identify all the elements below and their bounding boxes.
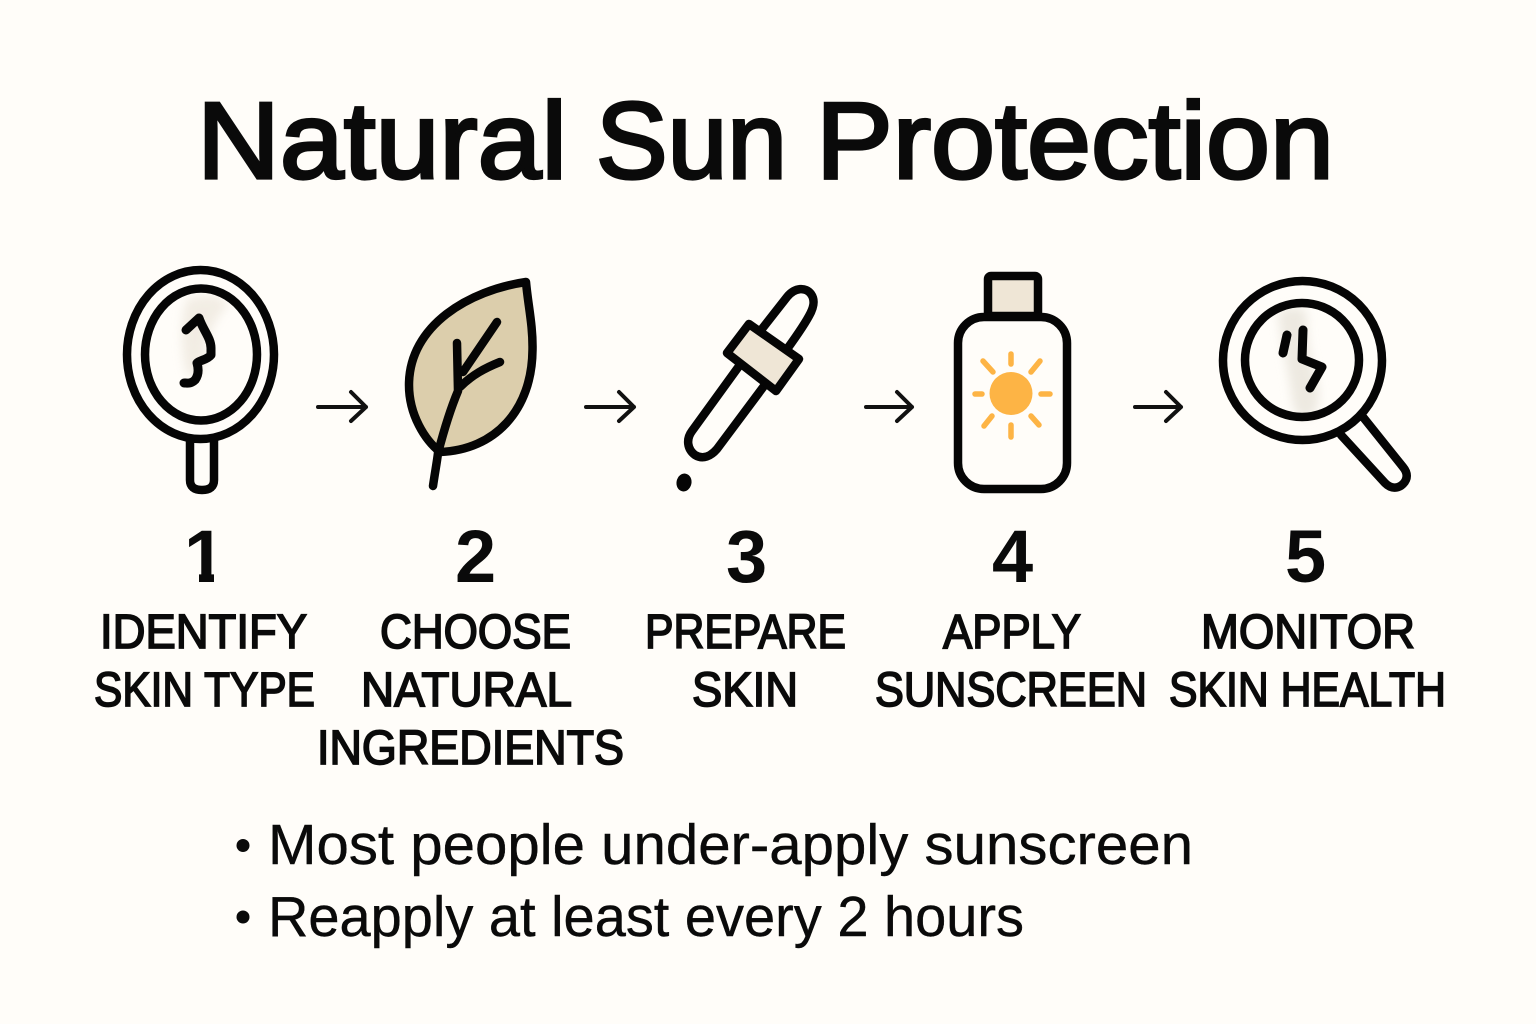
step 3 label: SKIN (692, 664, 798, 717)
arrow 2 (586, 392, 634, 421)
step 1 label: SKIN TYPE (94, 664, 315, 717)
step 4 label (875, 515, 1147, 717)
step 1 label: IDENTIFY (100, 606, 307, 659)
step 5 label: MONITOR (1201, 606, 1415, 659)
title: Natural (197, 80, 567, 202)
step 2 label: INGREDIENTS (317, 722, 624, 775)
step 5 label: 5 (1285, 515, 1326, 598)
bullet: reapply: Reapply at least every 2 hours (268, 885, 1024, 949)
title: Sun (596, 80, 787, 202)
step 3 label: 3 (726, 515, 767, 598)
arrow 3 (866, 392, 912, 421)
arrow 1 (318, 392, 366, 421)
step 4 label: SUNSCREEN (875, 664, 1147, 717)
title: Protection (816, 80, 1334, 202)
step 2 label: CHOOSE (380, 606, 571, 659)
bullet: under-apply: Most people under-apply sunscreen (268, 813, 1193, 877)
icon: dropper (675, 289, 814, 493)
arrow 4 (1135, 392, 1181, 421)
step 3 label: PREPARE (645, 606, 846, 659)
step 5 label: SKIN HEALTH (1169, 664, 1446, 717)
step 2 label (317, 515, 624, 775)
icon: leaf (409, 282, 533, 486)
step 3 label (645, 515, 846, 717)
step 4 label: 4 (992, 515, 1033, 598)
title (197, 80, 1334, 202)
step 2 label: NATURAL (361, 664, 572, 717)
icon: sunscreen bottle with sun (958, 276, 1067, 489)
icon: magnifying glass with skin mark (1223, 281, 1407, 488)
step 4 label: APPLY (943, 606, 1081, 659)
step 1 label: 1 (184, 515, 225, 598)
step 1 label (95, 530, 314, 708)
step 5 label (1169, 515, 1446, 717)
icon: hand mirror with face profile (127, 270, 274, 490)
step 2 label: 2 (455, 515, 496, 598)
